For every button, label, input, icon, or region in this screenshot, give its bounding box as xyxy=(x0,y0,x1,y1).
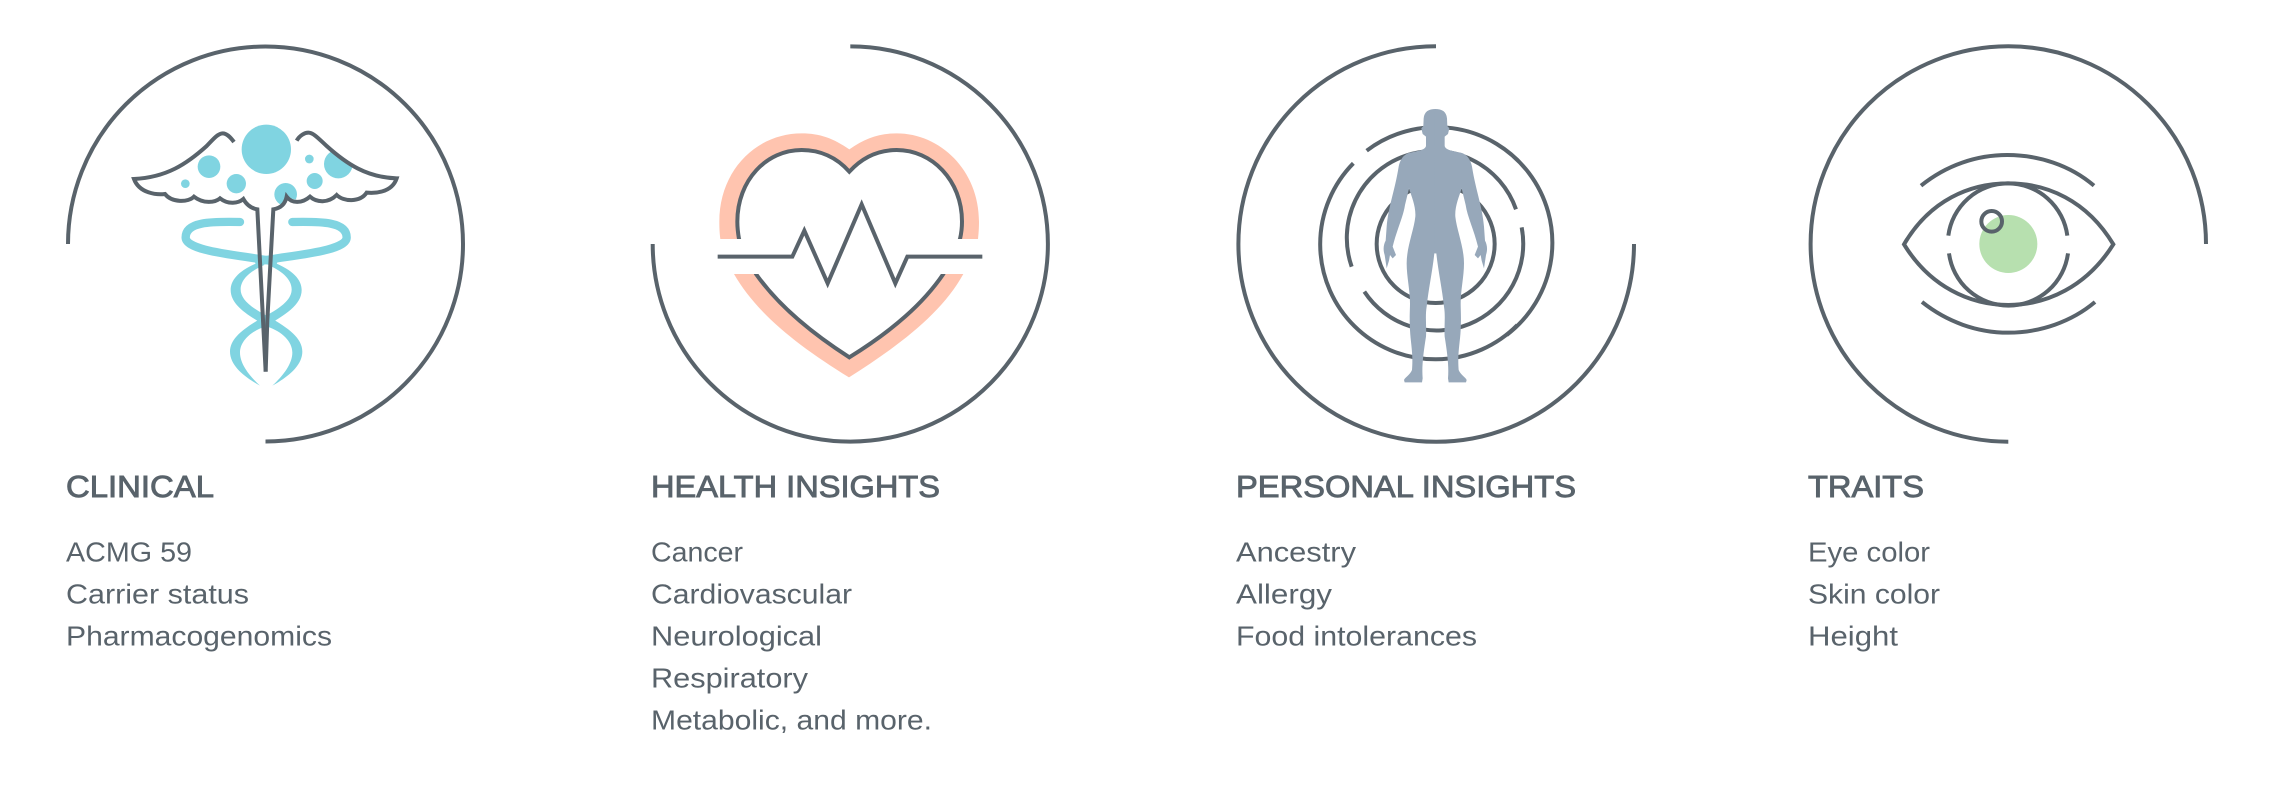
list: traits items xyxy=(1808,536,1940,652)
list: health items: Respiratory xyxy=(651,662,808,694)
heading: clinical: CLINICAL xyxy=(66,469,214,504)
icon: heart with pulse xyxy=(697,133,1003,377)
list: health items xyxy=(651,536,932,736)
panel: health insights xyxy=(651,46,1048,735)
icon: eye xyxy=(1904,155,2113,333)
body silhouette xyxy=(1384,109,1487,382)
icon: personal partial ring xyxy=(1238,46,1634,442)
eye outline xyxy=(1904,183,2113,305)
panel: traits xyxy=(1808,46,2206,651)
icon: health partial ring xyxy=(653,46,1048,442)
list: health items: Metabolic, and more. xyxy=(651,704,932,736)
icon: human figure with rings xyxy=(1320,109,1552,382)
heading: personal insights: PERSONAL INSIGHTS xyxy=(1236,469,1576,504)
panel: clinical xyxy=(66,47,463,652)
list: traits items: Height xyxy=(1808,620,1898,652)
pulse line xyxy=(718,204,982,283)
eyelid arcs xyxy=(1921,155,2095,333)
list: traits items: Skin color xyxy=(1808,578,1940,610)
green pupil xyxy=(1979,215,2037,273)
list: personal items: Allergy xyxy=(1236,578,1332,610)
list: personal items: Ancestry xyxy=(1236,536,1356,568)
heading: health insights: HEALTH INSIGHTS xyxy=(651,469,940,504)
list: clinical items: Carrier status xyxy=(66,578,249,610)
list: health items: Cancer xyxy=(651,536,743,568)
highlight ring xyxy=(1981,211,2002,232)
panel: personal insights xyxy=(1236,46,1634,651)
list: health items: Cardiovascular xyxy=(651,578,852,610)
list: clinical items: Pharmacogenomics xyxy=(66,620,332,652)
grey inner heart xyxy=(737,150,962,357)
list: personal items: Food intolerances xyxy=(1236,620,1477,652)
teal entwined snakes xyxy=(186,222,347,386)
list: health items: Neurological xyxy=(651,620,822,652)
list: clinical items: ACMG 59 xyxy=(66,536,192,568)
teal wing dots xyxy=(181,125,353,206)
list: clinical items xyxy=(66,536,332,652)
grey wings and staff xyxy=(134,133,397,372)
heading: traits: TRAITS xyxy=(1808,469,1924,504)
peach heart outline xyxy=(719,133,979,377)
icon: traits partial ring xyxy=(1811,46,2206,442)
icon: caduceus xyxy=(134,125,397,386)
list: personal items xyxy=(1236,536,1477,652)
concentric rings xyxy=(1320,127,1552,359)
list: traits items: Eye color xyxy=(1808,536,1930,568)
icon: clinical partial ring xyxy=(68,47,463,442)
iris arcs xyxy=(1948,183,2068,306)
